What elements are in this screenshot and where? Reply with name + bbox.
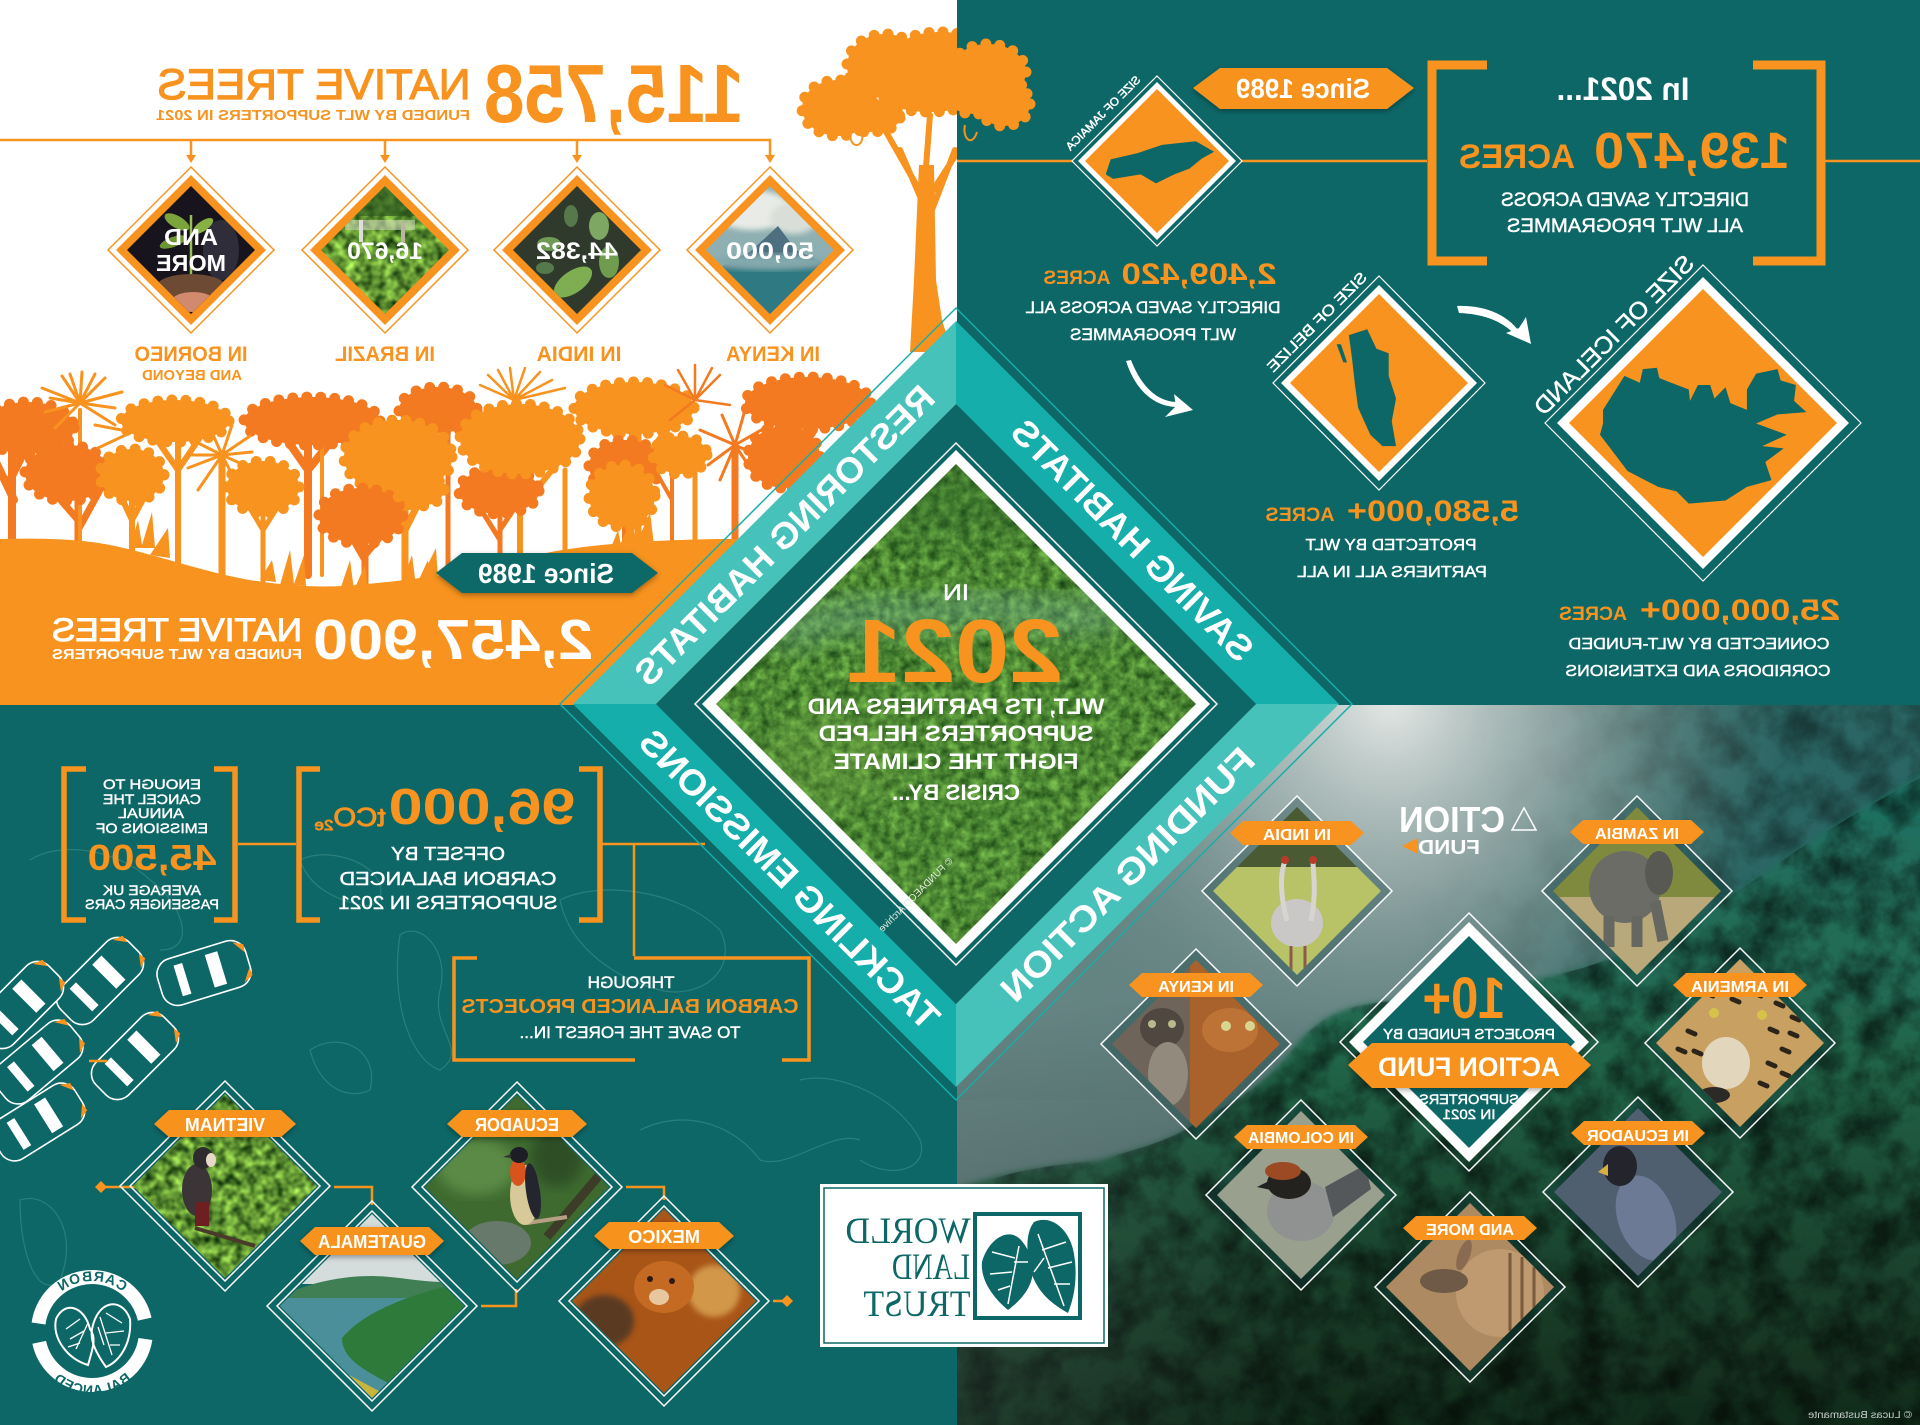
panel: restoring habitats background (0, 0, 1030, 705)
diamond: in Armenia (1645, 948, 1835, 1138)
heading: 115,758 native trees: 115,758 (484, 47, 744, 140)
stat: 5,580,000+ acres (1266, 495, 1519, 581)
connector line (957, 160, 1920, 162)
central diamond: 2021 summary: 2021 (847, 602, 1063, 702)
diamond labels: AND BEYOND (142, 367, 242, 384)
diamond: Vietnam: VIETNAM (185, 1115, 265, 1135)
badge: since 1989: Since 1989 (478, 558, 614, 589)
arrow: to Belize (1126, 360, 1193, 417)
diamond: India 44,382: 44,382 (536, 238, 618, 265)
band: restoring habitats (573, 321, 956, 704)
heading: 2,457,900 native trees: NATIVE TREES (52, 612, 302, 648)
cars (0, 931, 255, 1167)
callout: 96,000 tCO2e offset: tCO (339, 802, 386, 832)
diamond: Guatemala: GUATEMALA (318, 1232, 426, 1252)
central diamond: ribbon bands (560, 308, 1352, 1100)
stat: 5,580,000+ acres: ACRES (1266, 505, 1334, 526)
callout: carbon balanced projects: TO SAVE THE FOREST IN... (519, 1023, 741, 1042)
badge: since 1989 (1193, 68, 1414, 109)
diamond: in Kenya (1101, 949, 1291, 1139)
diamond: size of Iceland: SIZE OF ICELAND (1529, 250, 1700, 421)
central diamond: 2021 summary: FIGHT THE CLIMATE (834, 749, 1078, 774)
logo: action fund: CTION (1399, 799, 1505, 840)
band: saving habitats: SAVING HABITATS (1003, 411, 1262, 670)
logo: World Land Trust (820, 1184, 1108, 1347)
logo: carbon balanced: CARBON (57, 1271, 126, 1291)
band: restoring habitats: RESTORING HABITATS (626, 377, 943, 694)
badge: since 1989: Since 1989 (1236, 73, 1370, 104)
stat: 25,000,000+ acres: 25,000,000+ (1640, 594, 1840, 627)
stat: 2,409,420 acres: DIRECTLY SAVED ACROSS ALL (1026, 298, 1280, 317)
callout: 139,470 acres in 2021: ALL WLT PROGRAMMES (1507, 215, 1743, 237)
callout: 139,470 acres in 2021: ACRES (1459, 138, 1575, 176)
band: tackling emissions (573, 704, 956, 1087)
central diamond: 2021 summary: © FUNDAECO Archive (877, 856, 955, 935)
panel: funding action photo background (940, 705, 1920, 1425)
diamond: in Kenya: IN KENYA (1158, 979, 1234, 996)
callout: 45,500 cars (64, 769, 235, 920)
grass tufts (130, 512, 654, 590)
connector lines (238, 844, 705, 956)
band: funding action (956, 704, 1339, 1087)
central diamond: 10+ projects: PROJECTS FUNDED BY (1383, 1026, 1555, 1043)
logo: World Land Trust: LAND (892, 1247, 970, 1288)
diamond: size of Belize: SIZE OF BELIZE (1264, 269, 1371, 376)
callout: 139,470 acres in 2021: In 2021... (1556, 71, 1690, 107)
callout: 45,500 cars: EMISSIONS OF (96, 820, 208, 836)
diamond: Mexico: MEXICO (628, 1227, 700, 1247)
central diamond: 10+ projects: SUPPORTERS (1419, 1091, 1519, 1107)
tree crown overlap (941, 44, 1030, 140)
diamond: Ecuador: ECUADOR (475, 1115, 559, 1135)
badge: since 1989 (436, 553, 658, 593)
stat: 25,000,000+ acres: CONNECTED BY WLT-FUNDED (1568, 636, 1830, 653)
diamond: and more (1375, 1192, 1565, 1382)
diamond labels: IN INDIA (536, 343, 622, 366)
callout: carbon balanced projects (454, 958, 809, 1060)
connector arrows (0, 140, 775, 163)
stat: 2,409,420 acres: 2,409,420 (1122, 258, 1276, 291)
logo: action fund: FUND (1418, 837, 1480, 859)
arrow: to Iceland (1457, 306, 1531, 344)
central diamond: 10+ projects: 10+ (1422, 966, 1506, 1031)
stat: 5,580,000+ acres: 5,580,000+ (1347, 495, 1519, 528)
diamond: Kenya 50,000 (687, 167, 853, 333)
diamond: in Zambia (1542, 796, 1732, 986)
diamond: in Armenia: IN ARMENIA (1691, 979, 1789, 996)
heading: 115,758 native trees: NATIVE TREES (158, 61, 470, 109)
logo: World Land Trust: WORLD (846, 1211, 970, 1252)
diamond labels: IN BORNEO (134, 343, 248, 366)
callout: 45,500 cars: ANNUAL (118, 805, 184, 821)
diamond: in Ecuador (1543, 1097, 1733, 1287)
photo credit: © Lucas Bustamante (1808, 1409, 1912, 1421)
diamond: in India (1202, 796, 1392, 986)
diamond labels: IN BRAZIL (335, 343, 435, 366)
panel: funding action content (1101, 796, 1912, 1421)
central diamond: 2021 summary: WLT, ITS PARTNERS AND (808, 694, 1104, 719)
band: funding action: FUNDING ACTION (992, 739, 1263, 1010)
diamond: Borneo and more: AND (164, 224, 218, 250)
central diamond: 10+ projects: ACTION FUND (1378, 1052, 1560, 1082)
diamond: size of Iceland (1529, 250, 1861, 581)
diamond: and more: AND MORE (1426, 1222, 1514, 1239)
central diamond: 2021 summary: IN (943, 580, 969, 605)
diamond: India 44,382 (494, 167, 660, 333)
callout: 96,000 tCO2e offset: CARBON BALANCED (340, 869, 556, 889)
central diamond: 2021 summary: CRISIS BY... (892, 780, 1020, 805)
diamond: in Colombia: IN COLOMBIA (1248, 1130, 1354, 1147)
callout: 139,470 acres in 2021 (1432, 65, 1821, 261)
callout: 45,500 cars: ENOUGH TO (103, 776, 201, 792)
forest silhouette (0, 365, 871, 590)
callout: carbon balanced projects: THROUGH (588, 973, 674, 992)
callout: 96,000 tCO2e offset: SUPPORTERS IN 2021 (338, 893, 558, 913)
callout: 96,000 tCO2e offset: OFFSET BY (391, 844, 505, 864)
diamond: Brazil 16,670: 16,670 (347, 238, 423, 265)
logo: carbon balanced: BALANCED (56, 1372, 130, 1392)
diamond: Guatemala (267, 1201, 477, 1411)
logo: carbon balanced (32, 1270, 152, 1392)
diamond: Borneo and more: MORE (156, 250, 226, 276)
diamond: in Colombia (1206, 1100, 1396, 1290)
diamond: Ecuador (412, 1082, 622, 1292)
logo: action fund (1399, 799, 1536, 859)
heading: 115,758 native trees: FUNDED BY WLT SUPPORTERS IN 2021 (156, 107, 470, 124)
central diamond: 2021 summary (656, 404, 1256, 1004)
callout: 139,470 acres in 2021: DIRECTLY SAVED ACROSS (1501, 189, 1749, 211)
callout: 45,500 cars: AVERAGE UK (102, 882, 201, 898)
heading: 2,457,900 native trees: 2,457,900 (313, 608, 593, 672)
diamond: Vietnam (120, 1081, 330, 1291)
diamond: Kenya 50,000: 50,000 (726, 238, 814, 265)
diamond: in India: IN INDIA (1263, 827, 1331, 844)
panel: tackling emissions (0, 766, 922, 1412)
callout: 45,500 cars: PASSENGER CARS (85, 896, 219, 912)
stat: 5,580,000+ acres: PROTECTED BY WLT (1305, 537, 1476, 554)
callout: 96,000 tCO2e offset: 96,000 (388, 778, 576, 835)
aerial forest photo (716, 460, 1196, 944)
diamond: in Zambia: IN ZAMBIA (1595, 826, 1679, 843)
diamond: Borneo and more (108, 167, 274, 333)
callout: 96,000 tCO2e offset (299, 769, 600, 920)
central diamond: 10+ projects (1340, 913, 1598, 1171)
callout: 45,500 cars: CANCEL THE (103, 791, 201, 807)
diamond: Mexico (559, 1196, 769, 1406)
panel: saving habitats (941, 0, 1920, 705)
stat: 25,000,000+ acres: ACRES (1559, 604, 1627, 625)
band: tackling emissions: TACKLING EMISSIONS (631, 721, 948, 1038)
stat: 2,409,420 acres (1026, 258, 1280, 344)
band: saving habitats (956, 321, 1339, 704)
diamond: size of Jamaica: SIZE OF JAMAICA (1064, 74, 1143, 154)
diamond: size of Belize (1264, 269, 1485, 490)
heading: 2,457,900 native trees (52, 608, 593, 672)
callout: 96,000 tCO2e offset: 2e (314, 817, 333, 834)
diamond: Brazil 16,670 (302, 167, 468, 333)
diamond: size of Jamaica (1064, 74, 1242, 246)
diamond labels: IN KENYA (726, 343, 820, 366)
stat: 25,000,000+ acres: CORRIDORS AND EXTENSIONS (1566, 663, 1830, 680)
logo: World Land Trust: TRUST (864, 1284, 970, 1325)
callout: 45,500 cars: 45,500 (88, 837, 216, 878)
big rainforest tree (802, 32, 1030, 352)
diamond: in Ecuador: IN ECUADOR (1587, 1128, 1689, 1145)
central diamond: 2021 summary: SUPPORTERS HELPED (818, 721, 1094, 746)
heading: 115,758 native trees (156, 47, 744, 140)
diamond labels (134, 343, 820, 384)
stat: 5,580,000+ acres: PARTNERS ALL IN ALL (1297, 564, 1487, 581)
central diamond: 10+ projects: IN 2021 (1442, 1106, 1496, 1122)
stat: 2,409,420 acres: ACRES (1044, 268, 1110, 289)
icon: leaves (982, 1220, 1076, 1313)
stat: 2,409,420 acres: WLT PROGRAMMES (1070, 325, 1236, 344)
stat: 25,000,000+ acres (1559, 594, 1840, 680)
callout: carbon balanced projects: CARBON BALANCED PROJECTS (461, 996, 799, 1018)
orange ground (0, 539, 900, 705)
heading: 2,457,900 native trees: FUNDED BY WLT SUPPORTERS (52, 646, 302, 663)
callout: 139,470 acres in 2021: 139,470 (1594, 122, 1790, 179)
project connector lines (89, 1061, 793, 1307)
